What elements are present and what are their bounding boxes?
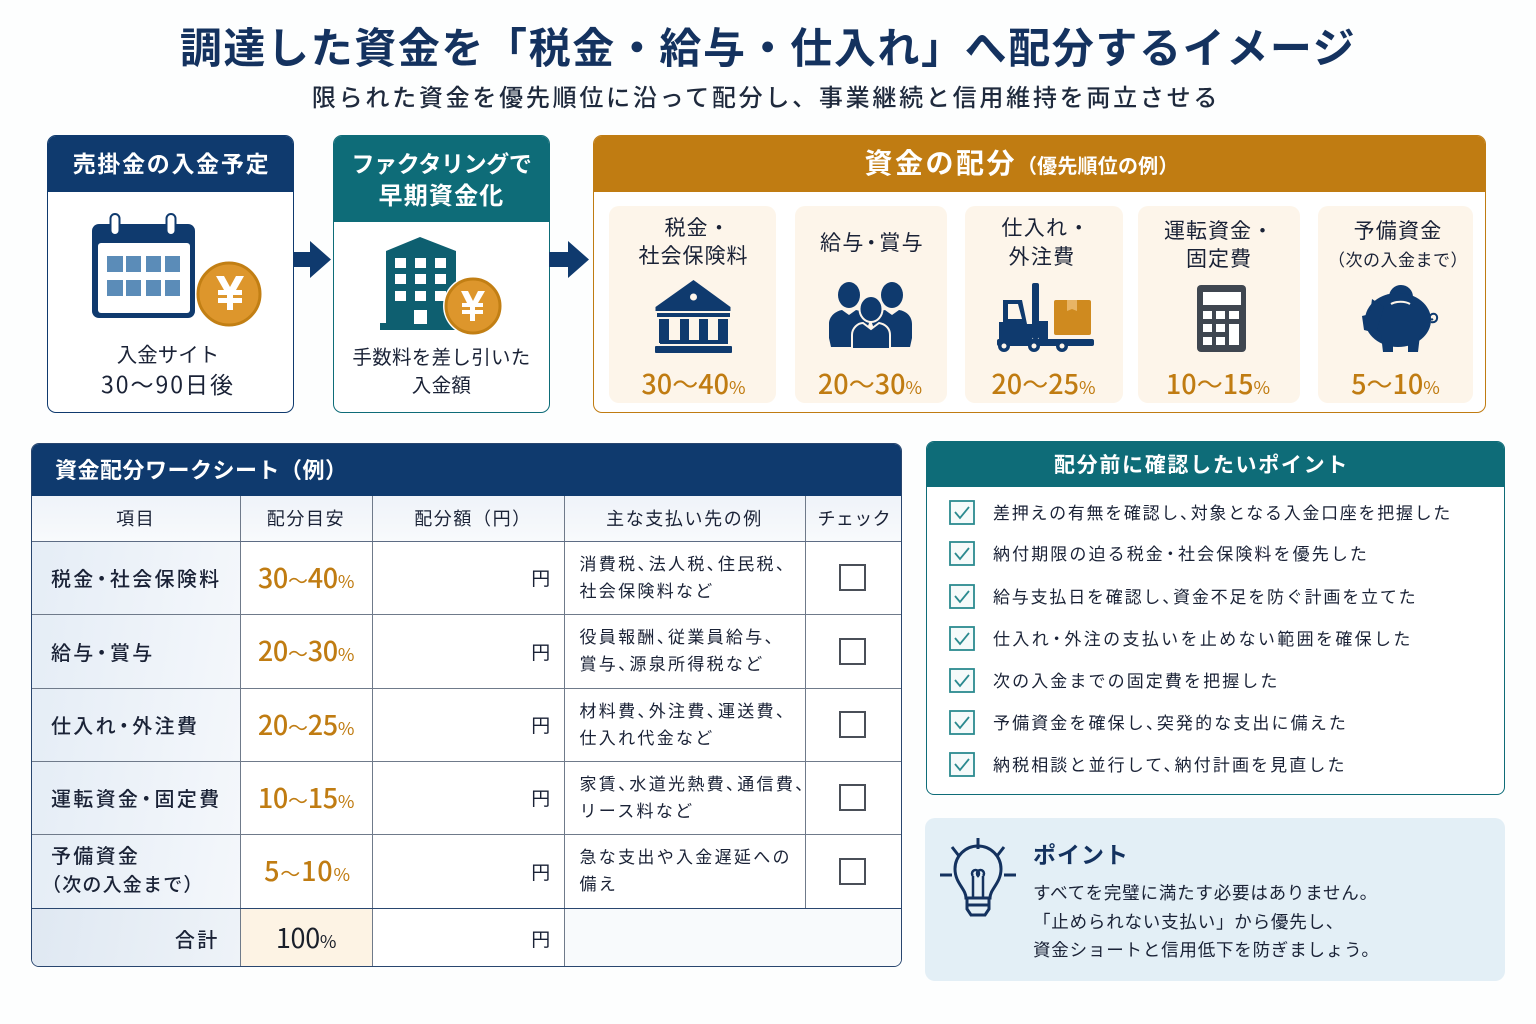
label: [1164, 220, 1274, 271]
arrow: to allocation: [549, 241, 589, 278]
label: [1328, 220, 1468, 270]
card: salary and bonus: [795, 206, 947, 403]
text: payment site: 入金サイト: [117, 338, 219, 368]
table: allocation worksheet: 家賃、水道光熱費、通信費、: [580, 774, 814, 794]
table: allocation worksheet: 仕入れ代金など: [580, 728, 715, 748]
check item 2: [949, 541, 1369, 566]
table: allocation worksheet: 円: [531, 642, 552, 664]
table: allocation worksheet: 20～25%: [258, 704, 354, 742]
panel: receivable schedule: [47, 135, 294, 413]
check item 4: [949, 626, 1413, 651]
check item 7: 納税相談と並行して、納付計画を見直した: [993, 756, 1347, 775]
card: working capital and fixed costs: [1138, 206, 1300, 403]
table: allocation worksheet: 社会保険料など: [580, 582, 715, 600]
heading: checklist: 配分前に確認したいポイント: [1054, 454, 1349, 477]
check item 5: 次の入金までの固定費を把握した: [993, 672, 1280, 691]
text: point body: 資金ショートと信用低下を防ぎましょう。: [1033, 940, 1380, 960]
icon: building with yen coin: [380, 237, 502, 334]
text: payment site: 30～90日後: [101, 366, 235, 400]
label: 固定費: [1186, 248, 1252, 271]
heading: point: ポイント: [1033, 842, 1129, 868]
text: net deposit: 入金額: [412, 375, 471, 397]
table: allocation worksheet: 円: [531, 716, 552, 737]
heading: fund allocation: [593, 135, 1486, 192]
panel: fund allocation: [593, 135, 1486, 413]
icon: calculator: [1197, 285, 1246, 352]
label: 社会保険料: [638, 245, 748, 268]
percentage: 5～10%: [1351, 363, 1440, 402]
table: allocation worksheet: 税金・社会保険料: [51, 569, 221, 591]
subtitle: 限られた資金を優先順位に沿って配分し、事業継続と信用維持を両立させる: [312, 85, 1220, 112]
text: point body: 「止められない支払い」から優先し、: [1033, 912, 1344, 932]
table: allocation worksheet: 材料費、外注費、運送費、: [580, 702, 795, 720]
label: （次の入金まで）: [1328, 251, 1468, 270]
table: allocation worksheet: 項目: [116, 509, 155, 529]
table: allocation worksheet: [32, 496, 901, 966]
table: allocation worksheet: 仕入れ・外注費: [51, 716, 199, 738]
title: 調達した資金を「税金・給与・仕入れ」へ配分するイメージ: [180, 25, 1356, 72]
heading: checklist: [926, 441, 1505, 487]
table: allocation worksheet: 円: [531, 789, 552, 810]
check item 1: [949, 500, 1452, 525]
check item 2: 納付期限の迫る税金・社会保険料を優先した: [993, 545, 1369, 564]
check item 6: [949, 710, 1348, 735]
text: point body: [1033, 883, 1380, 960]
card: tax and social insurance: [609, 206, 776, 403]
heading: fund allocation: 資金の配分（優先順位の例）: [864, 148, 1179, 179]
text: net deposit: 手数料を差し引いた: [352, 347, 531, 369]
table: allocation worksheet: 合計: [175, 930, 220, 952]
table: allocation worksheet: 運転資金・固定費: [51, 789, 221, 811]
table: allocation worksheet: 給与・賞与: [51, 642, 155, 664]
heading: factoring: 早期資金化: [378, 183, 504, 210]
text: payment site: [101, 338, 235, 400]
panel: worksheet: [31, 443, 902, 967]
table: allocation worksheet: リース料など: [580, 802, 694, 820]
label: [638, 217, 748, 268]
card: reserve funds: [1318, 206, 1473, 403]
card: purchases and outsourcing: [965, 206, 1123, 403]
label: 予備資金: [1354, 220, 1442, 243]
text: net deposit: [352, 347, 531, 397]
heading: worksheet: 資金配分ワークシート（例）: [55, 458, 348, 483]
label: 運転資金・: [1164, 220, 1274, 243]
icon: calendar with yen coin: [92, 213, 262, 326]
table: allocation worksheet: 賞与、源泉所得税など: [580, 655, 765, 674]
label: 外注費: [1009, 246, 1075, 269]
table: allocation worksheet: 円: [531, 930, 552, 951]
label: 仕入れ・: [1001, 217, 1091, 240]
table: allocation worksheet: 配分額（円）: [414, 509, 532, 529]
table: allocation worksheet: 100%: [276, 917, 336, 956]
panel: point callout: [925, 818, 1505, 981]
table: allocation worksheet: 30～40%: [258, 556, 354, 596]
table: allocation worksheet: 主な支払い先の例: [606, 509, 763, 529]
percentage: 10～15%: [1166, 363, 1270, 402]
heading: receivable schedule: [47, 135, 296, 192]
table: allocation worksheet: 20～30%: [258, 630, 354, 669]
check item 6: 予備資金を確保し、突発的な支出に備えた: [993, 714, 1348, 733]
table: allocation worksheet: 予備資金: [51, 846, 140, 868]
icon: forklift: [997, 283, 1094, 352]
text: point body: すべてを完璧に満たす必要はありません。: [1033, 883, 1378, 903]
table: allocation worksheet: 10～15%: [258, 776, 354, 816]
table: allocation worksheet: チェック: [817, 509, 891, 529]
table: allocation worksheet: 円: [531, 569, 552, 590]
heading: worksheet: [31, 443, 904, 496]
panel: factoring: [333, 135, 550, 413]
percentage: 20～25%: [991, 363, 1096, 402]
icon: bank: [655, 280, 732, 353]
check item 4: 仕入れ・外注の支払いを止めない範囲を確保した: [993, 630, 1413, 649]
check item 1: 差押えの有無を確認し、対象となる入金口座を把握した: [993, 504, 1452, 523]
label: [1001, 217, 1091, 269]
table: allocation worksheet: 備え: [580, 875, 618, 894]
percentage: 20～30%: [818, 363, 922, 402]
heading: receivable schedule: 売掛金の入金予定: [73, 151, 270, 177]
table: allocation worksheet: 円: [531, 862, 552, 884]
check item 7: [949, 752, 1347, 777]
table: allocation worksheet: （次の入金まで）: [42, 874, 204, 896]
icon: people: [829, 282, 912, 348]
table: allocation worksheet: 5～10%: [264, 850, 351, 889]
heading: factoring: [333, 135, 550, 222]
icon: piggy bank: [1362, 285, 1438, 352]
check item 5: [949, 668, 1280, 693]
percentage: 30～40%: [641, 363, 746, 402]
check item 3: 給与支払日を確認し、資金不足を防ぐ計画を立てた: [993, 588, 1417, 607]
table: allocation worksheet: 配分目安: [267, 509, 345, 529]
heading: factoring: ファクタリングで: [352, 151, 531, 177]
icon: light bulb: [940, 838, 1016, 916]
table: allocation worksheet: 急な支出や入金遅延への: [580, 848, 792, 867]
table: allocation worksheet: 役員報酬、従業員給与、: [580, 628, 784, 647]
check item 3: [949, 584, 1417, 609]
label: 給与・賞与: [820, 232, 924, 255]
label: 税金・: [664, 217, 730, 240]
arrow: to factoring: [294, 241, 331, 278]
panel: checklist: [926, 441, 1505, 795]
table: allocation worksheet: 消費税、法人税、住民税、: [580, 554, 795, 574]
